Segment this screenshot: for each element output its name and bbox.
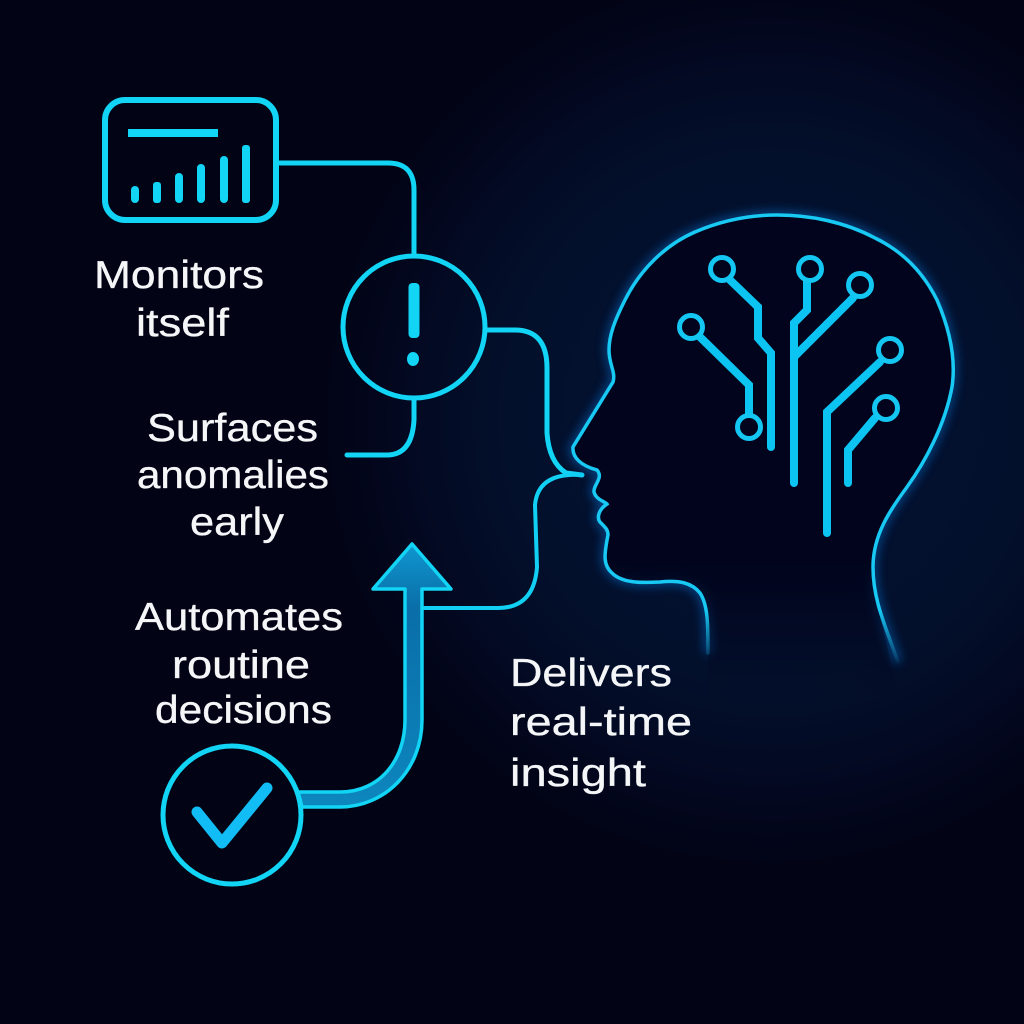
label: monitors itself: [94, 254, 264, 345]
label: surfaces anomalies early: Surfaces: [147, 407, 318, 450]
label: delivers real-time insight: real-time: [510, 701, 692, 744]
panel: automates routine decisions: [135, 596, 343, 884]
label: monitors itself: Monitors: [94, 254, 264, 297]
label: delivers real-time insight: Delivers: [510, 652, 672, 695]
panel: surfaces anomalies: [137, 256, 485, 544]
circuit brain: [680, 258, 902, 533]
connector: face to arrow: [422, 475, 582, 608]
connector: monitor to alert: [280, 163, 414, 255]
label: surfaces anomalies early: [137, 407, 329, 544]
label: monitors itself: itself: [136, 302, 229, 345]
head glow: [573, 215, 953, 662]
panel: monitors itself: [94, 100, 276, 345]
icon: check circle: [163, 746, 301, 884]
head outline: [573, 215, 953, 662]
label: surfaces anomalies early: anomalies: [137, 454, 329, 497]
head interior: [573, 215, 953, 700]
label: surfaces anomalies early: early: [190, 501, 285, 544]
panel: head with circuit brain: [573, 215, 953, 700]
label: automates routine decisions: [135, 596, 343, 732]
arrow: check to up: [298, 544, 451, 807]
label: delivers real-time insight: [510, 652, 692, 795]
label: automates routine decisions: decisions: [155, 689, 332, 732]
label: automates routine decisions: routine: [172, 644, 310, 687]
connector: alert stem: [347, 400, 414, 455]
connector: alert to face: [487, 330, 582, 475]
label: delivers real-time insight: insight: [510, 752, 646, 795]
label: automates routine decisions: Automates: [135, 596, 343, 639]
icon: dashboard monitor: [105, 100, 276, 220]
icon: alert circle: [343, 256, 485, 398]
